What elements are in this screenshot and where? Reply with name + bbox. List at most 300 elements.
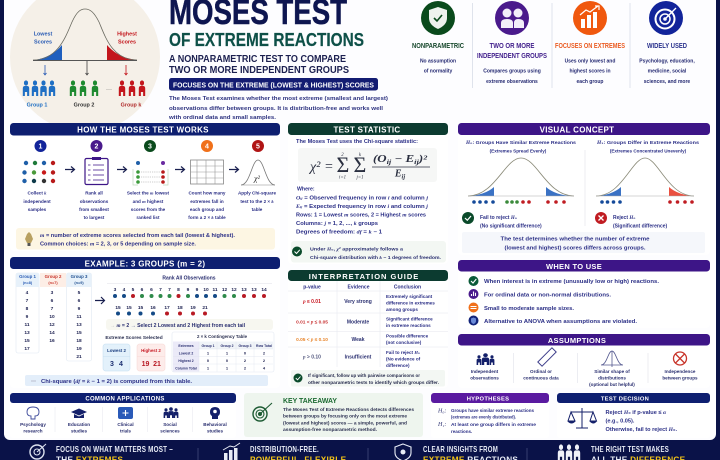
decision: reject: Reject H₀	[613, 215, 636, 221]
group 2 column: Group 2	[45, 274, 62, 279]
ranked observations: 10	[203, 287, 209, 293]
group 1 column: 13	[24, 330, 30, 336]
heading	[288, 270, 448, 281]
ranked observations: 13	[241, 287, 247, 293]
panel: hypotheses: Groups have similar extreme reactions	[451, 408, 534, 413]
heading: INTERPRETATION GUIDE	[309, 272, 419, 281]
panel: test decision: (e.g., 0.05).	[606, 418, 635, 424]
ranked observations: 15	[115, 305, 121, 311]
ordinal or continuous data	[523, 348, 559, 380]
feature: groups: TWO OR MORE	[490, 43, 535, 50]
heading: HYPOTHESES	[467, 396, 509, 402]
panel: test decision	[557, 393, 710, 438]
group 3 column: 13	[76, 322, 82, 328]
contingency table: 1	[207, 366, 210, 370]
footer: focus: FOCUS ON WHAT MATTERS MOST –	[56, 445, 173, 454]
arrow	[117, 166, 126, 172]
ranked observations: 7	[168, 287, 171, 293]
extreme scores selected: Extreme Scores Selected	[105, 335, 163, 341]
panel: key takeaway: between groups by focusing only on the most extreme	[283, 414, 408, 418]
heading: HOW THE MOSES TEST WORKS	[77, 125, 209, 134]
row: weak	[296, 334, 429, 345]
hero illustration: bell curve and groups	[10, 0, 160, 132]
group 2 column	[40, 273, 66, 344]
heading: WHEN TO USE	[546, 262, 602, 271]
group 3 column: 21	[76, 354, 82, 360]
ranked observations: 19	[190, 305, 196, 311]
group 3 column	[66, 273, 92, 361]
decision: fail to reject: (No significant difference)	[480, 224, 542, 230]
step 3: Select the m lowest	[127, 190, 170, 196]
panel: test statistic	[288, 123, 448, 264]
heading: TEST STATISTIC	[333, 125, 401, 134]
callout: follow up: If significant, follow up with pairwise comparisons or	[308, 373, 420, 378]
icon: scales	[568, 408, 596, 428]
panel: hypotheses: H₁:	[437, 422, 446, 428]
label: highest scores: Scores	[118, 40, 136, 46]
row: very strong: Extremely significant	[386, 294, 433, 299]
H0 bell curve	[465, 140, 576, 204]
panel: how the moses test works	[10, 123, 280, 251]
group 2 column: 10	[49, 314, 55, 320]
table header: Conclusion	[394, 284, 421, 290]
step 4	[188, 140, 226, 220]
ranked observations: 17	[164, 305, 170, 311]
group 1 column: 9	[26, 314, 29, 320]
concept summary: (lowest and highest) scores differs across groups.	[504, 246, 646, 252]
formula: (O	[373, 154, 384, 165]
group 3 column: (n=9)	[74, 281, 84, 285]
behavioral studies	[203, 407, 227, 434]
chi-square note: Chi-square ( df = k − 1 = 2) is computed from this table.	[41, 379, 193, 385]
item: extreme reactions: When interest is in extreme (unusually low or high) reactions.	[484, 279, 660, 285]
row: very strong: difference in extremes	[386, 300, 435, 306]
intro paragraph: The Moses Test examines whether the most extreme (smallest and largest)	[169, 96, 388, 102]
ranked observations: 6	[141, 287, 144, 293]
ranked observations	[107, 276, 272, 316]
psychology research: research	[23, 428, 43, 434]
panel: hypotheses: reactions.	[451, 429, 472, 434]
step 1: samples	[28, 207, 47, 212]
group 3 column: 15	[76, 330, 82, 336]
contingency table: Lowest 2	[179, 352, 193, 356]
contingency table: Group 3	[238, 344, 252, 348]
group 3 column: 6	[78, 298, 81, 304]
formula: ij	[387, 159, 392, 166]
contingency table: 2 × k Contingency Table	[197, 334, 248, 339]
panel: visual concept	[458, 123, 710, 255]
group 3 column: 9	[78, 306, 81, 312]
subtitle	[169, 53, 349, 76]
extreme scores selected: 4	[119, 361, 123, 368]
social sciences	[160, 407, 180, 434]
group 1 column: (n=8)	[23, 281, 33, 285]
callout: choosing m	[16, 228, 275, 250]
panel: example	[10, 257, 280, 388]
panel: test decision: Reject H₀ if p-value ≤ α	[606, 410, 667, 416]
group 2 column: 7	[51, 306, 54, 312]
selection note: → m = 2 → Select 2 Lowest and 2 Highest from each tail	[110, 323, 246, 329]
where list: Where:	[297, 186, 315, 192]
group 2 column: 3	[51, 290, 54, 296]
title: OF EXTREME REACTIONS	[169, 29, 364, 50]
group 2 people	[70, 80, 98, 108]
contingency table: Row Total	[256, 344, 272, 348]
similar shape: distributions	[598, 376, 626, 380]
subtitle: A NONPARAMETRIC TEST TO COMPARE	[169, 53, 346, 65]
heading: TEST DECISION	[601, 396, 649, 402]
psychology research: Psychology	[20, 422, 46, 427]
panel: common applications	[10, 393, 236, 438]
formula: )²	[418, 154, 428, 165]
feature: groups: INDEPENDENT GROUPS	[477, 53, 547, 60]
feature: widely used: medicine, social	[648, 68, 687, 74]
row: very strong	[302, 294, 435, 312]
where list	[295, 186, 429, 236]
contingency table: 0	[207, 358, 210, 363]
ranked observations: 9	[187, 287, 190, 293]
education studies: studies	[71, 428, 87, 434]
behavioral studies: Behavioral	[203, 422, 227, 427]
footer: clear insights: CLEAR INSIGHTS FROM	[423, 445, 498, 454]
footer: distribution-free: DISTRIBUTION-FREE.	[250, 445, 319, 454]
row: very strong: p ≤ 0.01	[302, 299, 321, 305]
feature: focuses on extremes: highest scores in	[569, 68, 611, 74]
contingency table: 2	[244, 366, 247, 370]
heading: EXAMPLE: 3 GROUPS (m = 2)	[85, 260, 205, 268]
footer: the right test: THE RIGHT TEST MAKES	[591, 445, 669, 454]
contingency table: Column Total	[175, 366, 197, 370]
callout: distribution under H0: Chi-square distribution with k − 1 degrees of freedom.	[310, 255, 441, 260]
independence between groups: Independence	[665, 369, 696, 374]
banner: FOCUSES ON THE EXTREME (LOWEST & HIGHEST) SCORES	[173, 80, 374, 90]
item: alternative to anova: Alternative to ANOVA when assumptions are violated.	[484, 319, 638, 325]
panel: hypotheses: (extremes are evenly distributed).	[451, 414, 516, 420]
heading	[458, 260, 710, 272]
step 2: Rank all	[85, 190, 103, 196]
extreme scores selected: 21	[153, 361, 161, 368]
selection note	[106, 319, 273, 330]
panel: test decision: Otherwise, fail to reject H₀.	[606, 427, 677, 433]
group 2 people: Group 2	[74, 102, 94, 108]
social sciences: Social	[163, 422, 177, 427]
education studies: Education	[68, 422, 90, 427]
group 3 column: 5	[78, 290, 81, 296]
extreme scores selected: Highest 2	[141, 348, 161, 353]
feature: widely used	[639, 1, 695, 85]
footer: focus	[30, 444, 173, 460]
group 1 column: 11	[24, 322, 30, 328]
ranked observations: 12	[231, 287, 237, 293]
heading: COMMON APPLICATIONS	[85, 396, 165, 402]
formula: 2	[341, 153, 344, 158]
item: ordinal data	[468, 289, 612, 299]
where list: Columns: j = 1, 2, ..., k groups	[296, 221, 378, 227]
clinical trials	[117, 407, 134, 434]
table header: Evidence	[348, 284, 370, 290]
group 3 column: Group 3	[71, 274, 88, 279]
group 1 people	[23, 80, 55, 108]
ranked observations: 13	[251, 287, 257, 293]
group 2 column: 12	[49, 322, 55, 328]
ranked observations: 18	[177, 305, 183, 311]
step 5: 5	[256, 144, 260, 150]
step 1: independent	[23, 199, 51, 204]
feature: nonparametric	[412, 1, 464, 74]
row: insufficient: difference)	[386, 363, 410, 368]
contingency table: Group 1	[202, 344, 215, 348]
behavioral studies: studies	[207, 428, 223, 434]
psychology research	[20, 407, 46, 434]
contingency table: 4	[263, 366, 266, 370]
step 4: Count how many	[188, 190, 226, 196]
footer: clear insights	[395, 444, 518, 460]
formula: Σ	[354, 152, 366, 177]
group 1 column: 17	[24, 346, 30, 352]
chi-square note	[25, 375, 268, 386]
H0 bell curve: (Extremes Spread Evenly)	[490, 148, 547, 154]
step 5	[238, 140, 276, 212]
heading	[458, 123, 710, 135]
ranked observations: Rank All Observations	[162, 276, 216, 282]
contingency table: 1	[226, 350, 229, 356]
independent observations: Independent	[471, 369, 499, 374]
table header: p-value	[303, 284, 321, 290]
independence between groups	[662, 352, 698, 380]
ranked observations: 7	[159, 287, 162, 293]
row: weak: (not conclusive)	[386, 340, 422, 345]
group 3 column: 19	[76, 346, 82, 352]
concept summary	[462, 232, 705, 253]
decision: fail to reject: Fail to reject H₀	[480, 215, 517, 221]
decision: reject	[595, 212, 668, 230]
arrows to groups	[44, 61, 128, 75]
label: highest scores	[117, 32, 137, 46]
group 2 column: (n=7)	[48, 281, 58, 285]
where list: Oij = Observed frequency in row i and column j	[296, 196, 429, 202]
arrow	[175, 166, 184, 172]
step 2: 2	[95, 144, 99, 150]
group k people	[119, 80, 145, 108]
formula: E	[395, 168, 402, 180]
row: moderate: Moderate	[347, 320, 369, 326]
panel: key takeaway	[244, 393, 423, 437]
formula: ij	[414, 159, 419, 166]
intro paragraph: observations differ between groups. It is distribution-free and works well	[169, 106, 384, 112]
step 4: each group and	[190, 207, 224, 212]
feature: focuses on extremes: each group	[577, 79, 603, 85]
ranked observations: 3	[114, 287, 117, 293]
feature: focuses on extremes	[555, 1, 625, 85]
feature: nonparametric: of normality	[424, 68, 453, 74]
ranked observations: 5	[132, 287, 135, 293]
education studies	[68, 408, 90, 434]
panel: key takeaway: assumption-free nonparametric method.	[283, 427, 377, 432]
step 4: extremes fall in	[190, 199, 224, 204]
ranked observations: 16	[150, 305, 156, 311]
formula	[298, 148, 437, 182]
ranked observations: 11	[212, 287, 218, 293]
group 1 column: 4	[26, 290, 29, 296]
contingency table: 2	[263, 350, 266, 356]
group 1 column: Group 1	[19, 274, 36, 279]
formula: i=1	[339, 176, 346, 180]
row: very strong: Very strong	[344, 299, 372, 305]
contingency table: Extremes	[178, 344, 194, 348]
panel: test statistic: The Moses Test uses the Chi-square statistic:	[296, 139, 418, 145]
feature: nonparametric: No assumption	[420, 58, 456, 64]
panel: key takeaway: (lowest and highest) scores — a simple, powerful, and	[283, 420, 407, 426]
feature: widely used: WIDELY USED	[647, 43, 687, 50]
independence between groups: between groups	[662, 376, 698, 380]
row: insufficient: p > 0.10	[302, 354, 321, 360]
step 2: observations	[80, 199, 109, 204]
ranked observations: 12	[222, 287, 227, 293]
heading	[10, 123, 280, 136]
clinical trials: trials	[120, 428, 131, 434]
group 1 column	[16, 273, 39, 353]
row: weak: 0.05 < p ≤ 0.10	[296, 337, 328, 343]
group k people: Group k	[121, 102, 141, 108]
step 5: Apply Chi-square	[238, 190, 276, 196]
ranked observations: 15	[138, 305, 143, 311]
arrow	[229, 166, 238, 172]
heading	[557, 393, 710, 403]
ranked observations: 15	[126, 305, 132, 311]
formula: Σ	[336, 152, 349, 177]
ordinal or continuous data: continuous data	[523, 376, 559, 380]
similar shape: Similar shape of	[594, 369, 630, 374]
step 3: scores from the	[131, 207, 166, 212]
similar shape	[589, 351, 635, 387]
panel: when to use	[458, 260, 710, 328]
formula: =	[325, 160, 333, 174]
ranked observations: 8	[177, 287, 180, 293]
ordinal or continuous data: Ordinal or	[530, 369, 552, 374]
ranked observations: 21	[202, 305, 208, 311]
subtitle: TWO OR MORE INDEPENDENT GROUPS	[169, 64, 349, 76]
item: extreme reactions	[468, 276, 660, 286]
row: moderate: 0.01 < p ≤ 0.05	[296, 320, 328, 326]
row: moderate	[296, 316, 433, 328]
step 3: ranked list	[137, 215, 160, 220]
decision: reject: (Significant difference)	[613, 224, 668, 230]
step 5: χ²	[253, 174, 261, 183]
callout: follow up	[291, 370, 445, 386]
feature: groups: Compares groups using	[483, 68, 541, 74]
panel: key takeaway: KEY TAKEAWAY	[283, 398, 337, 405]
ranked observations: 14	[261, 287, 267, 293]
where list: Eij = Expected frequency in row i and column j	[295, 204, 429, 210]
formula: − E	[391, 154, 415, 165]
step 2	[79, 140, 109, 220]
row: insufficient: Insufficient	[345, 354, 372, 360]
feature: widely used: sciences, and more	[644, 79, 690, 85]
heading	[10, 257, 280, 269]
panel: key takeaway: The Moses Test of Extreme Reactions detects differences	[283, 407, 415, 412]
step 5: table	[252, 207, 263, 212]
label: lowest scores: Lowest	[34, 32, 52, 38]
contingency table: 2	[244, 358, 247, 363]
group 1 people: Group 1	[27, 102, 47, 108]
contingency table: Group 2	[220, 344, 234, 348]
extreme scores selected: 3	[110, 361, 114, 368]
panel: hypotheses	[431, 393, 549, 438]
group 2 column: 14	[49, 330, 55, 336]
callout: choosing m: m = number of extreme scores selected from each tail (lowest & highest).	[40, 233, 236, 239]
row: very strong: among groups	[386, 307, 418, 312]
step 2: from smallest	[79, 207, 109, 212]
H1 bell curve	[596, 140, 699, 204]
where list: Rows: 1 = Lowest m scores, 2 = Highest m scores	[296, 212, 426, 218]
title	[169, 0, 364, 50]
feature: focuses on extremes: FOCUSES ON EXTREMES	[555, 43, 625, 50]
row: insufficient	[302, 350, 421, 368]
decision: fail to reject	[462, 212, 542, 230]
step 1: Collect k	[28, 190, 47, 196]
step 3	[127, 140, 170, 220]
independent observations: observations	[470, 376, 499, 380]
step 1	[22, 140, 55, 212]
heading	[458, 334, 710, 346]
social sciences: sciences	[160, 428, 180, 434]
contingency table: 1	[207, 350, 210, 356]
callout: choosing m: Common choices: m = 2, 3, or 5 depending on sample size.	[40, 242, 197, 248]
item: ordinal data: For ordinal data or non-normal distributions.	[484, 292, 612, 298]
row: insufficient: (No evidence of	[386, 356, 421, 362]
row: moderate: Significant difference	[386, 316, 433, 322]
heading	[288, 123, 448, 135]
extreme scores selected	[103, 335, 165, 371]
ranked observations: 4	[123, 287, 126, 293]
table header	[303, 284, 421, 290]
extreme scores selected: 19	[142, 361, 149, 368]
panel: hypotheses: H₀:	[437, 408, 446, 414]
arrow	[65, 166, 74, 172]
panel: assumptions	[458, 334, 710, 388]
step 3: 3	[148, 144, 152, 150]
formula: j=1	[356, 176, 363, 180]
group 1 column: 8	[26, 306, 29, 312]
group 1 column: 7	[26, 298, 29, 304]
footer: the right test	[558, 444, 686, 460]
panel: interpretation guide	[288, 270, 448, 388]
heading: ASSUMPTIONS	[548, 336, 606, 345]
feature: groups	[477, 1, 547, 85]
icon: target	[253, 403, 272, 421]
H1 bell curve: H₁: Groups Differ in Extreme Reactions	[596, 140, 699, 146]
step 4: form a 2 × k table	[188, 215, 226, 220]
label: highest scores: Highest	[117, 32, 137, 38]
hero illustration: bell curve and groups: ···	[106, 87, 112, 93]
feature: focuses on extremes: Uses only lowest and	[565, 58, 615, 64]
contingency table	[172, 332, 274, 372]
similar shape: (optional but helpful)	[589, 382, 635, 387]
row: moderate: in extreme reactions	[386, 323, 431, 328]
row: weak: Weak	[352, 337, 365, 343]
intro paragraph	[168, 96, 388, 121]
clinical trials: Clinical	[117, 422, 134, 427]
group 3 column: 18	[76, 338, 82, 344]
heading: VISUAL CONCEPT	[540, 125, 614, 134]
label: lowest scores: Scores	[34, 40, 52, 46]
group 3 column: 11	[76, 314, 82, 320]
callout: distribution under H0	[291, 241, 446, 262]
intro paragraph: with ordinal data and small samples.	[168, 115, 277, 121]
concept summary: The test determines whether the number of extreme	[500, 236, 650, 242]
step 5: test to the 2 × k	[240, 199, 274, 204]
row: weak: Possible difference	[386, 334, 429, 338]
